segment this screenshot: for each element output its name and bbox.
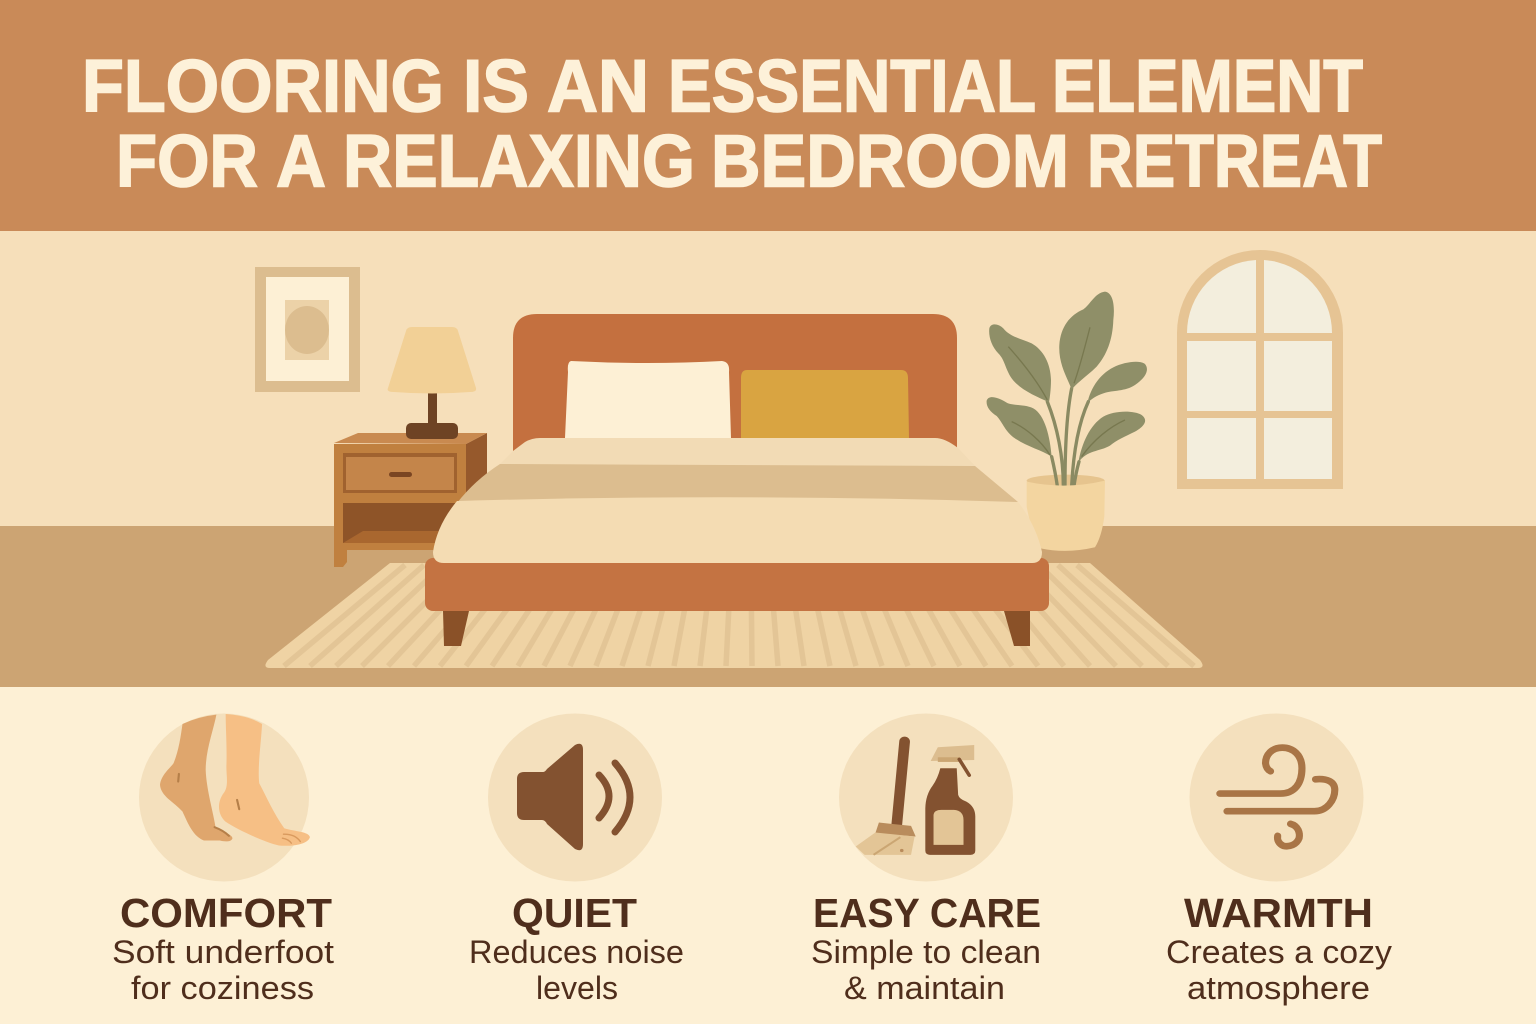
easy care label: EASY CARE — [813, 890, 1041, 936]
panel: floor — [0, 526, 1536, 687]
panel: wall background — [0, 231, 1536, 526]
title: BEDROOM — [711, 120, 1069, 202]
title: FOR — [116, 120, 258, 202]
table lamp — [388, 327, 476, 439]
nightstand — [334, 433, 487, 570]
title: AN — [547, 44, 649, 128]
bed legs — [443, 611, 1030, 646]
plant leaf veins — [1008, 327, 1125, 457]
white pillow — [565, 361, 731, 438]
icon: broom and spray bottle — [839, 714, 1013, 882]
icon: wind — [1190, 714, 1364, 882]
headboard — [513, 314, 957, 451]
panel: header band — [0, 0, 1536, 231]
title: ESSENTIAL — [668, 44, 1036, 128]
title: RELAXING — [343, 120, 695, 202]
icon: speaker — [488, 714, 662, 882]
framed wall art — [255, 267, 360, 392]
blanket band — [457, 464, 1018, 503]
rug — [265, 563, 1203, 668]
pot body — [1027, 481, 1105, 551]
warmth label: WARMTH — [1184, 890, 1373, 936]
comfort description — [112, 934, 334, 1006]
title — [82, 44, 1382, 202]
bed — [425, 314, 1049, 646]
panel: bottom benefits background — [0, 687, 1536, 1024]
comfort description: Soft underfoot — [112, 934, 334, 970]
easy care description — [811, 934, 1041, 1006]
quiet description: levels — [536, 970, 618, 1006]
lower duvet — [433, 497, 1042, 563]
quiet description: Reduces noise — [469, 934, 684, 970]
benefit: warmth — [1166, 714, 1392, 1006]
pot rim — [1027, 475, 1105, 487]
upper duvet — [498, 438, 977, 468]
benefit: easy care — [811, 714, 1041, 1006]
warmth description: Creates a cozy — [1166, 934, 1392, 970]
quiet label: QUIET — [512, 890, 637, 936]
potted plant — [987, 292, 1147, 551]
comfort label: COMFORT — [120, 890, 332, 936]
title: IS — [463, 44, 529, 128]
warmth description — [1166, 934, 1392, 1006]
icon: bare feet — [139, 714, 310, 882]
comfort description: for coziness — [131, 970, 314, 1006]
title: ELEMENT — [1052, 44, 1363, 128]
benefit: quiet — [469, 714, 684, 1006]
window — [1177, 250, 1343, 489]
warmth description: atmosphere — [1187, 970, 1370, 1006]
bed frame — [425, 558, 1049, 611]
title: A — [276, 120, 326, 202]
mustard pillow — [741, 370, 909, 438]
benefit: comfort — [112, 714, 334, 1006]
easy care description: & maintain — [844, 970, 1005, 1006]
title: RETREAT — [1087, 120, 1382, 202]
plant leaves — [987, 292, 1147, 463]
title: FLOORING — [82, 44, 444, 128]
easy care description: Simple to clean — [811, 934, 1041, 970]
plant stems — [1047, 388, 1088, 486]
quiet description — [469, 934, 684, 1006]
